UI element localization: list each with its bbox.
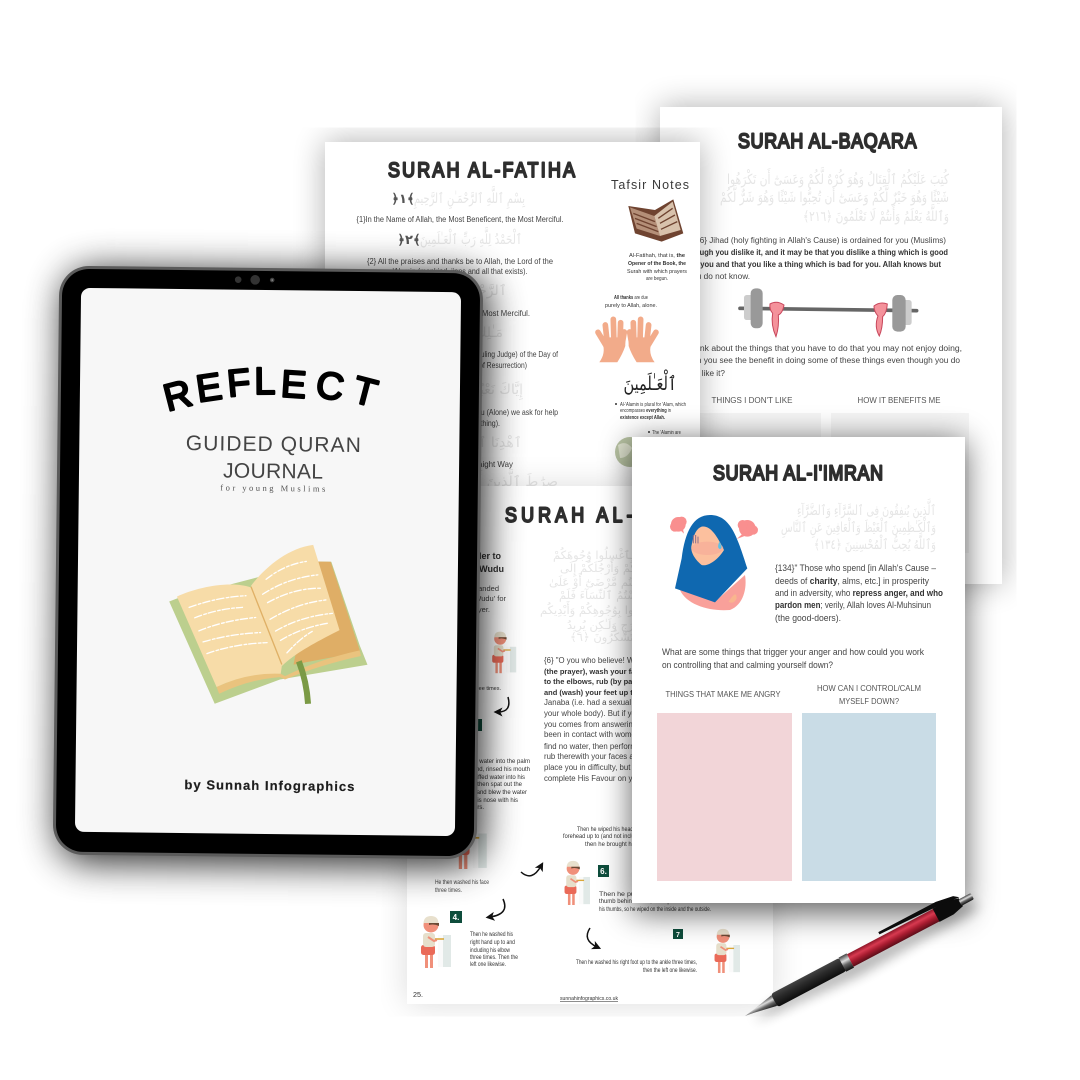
step 7 text [576, 960, 697, 974]
column label: MYSELF DOWN? [839, 696, 899, 706]
column label [817, 683, 921, 706]
arrow [498, 697, 509, 712]
verses and translations: مَـٰلِكِ يَوْمِ ٱلدِّينِ [412, 324, 503, 343]
verses and translations: (for each and everything). [420, 419, 500, 428]
tablet screen [75, 288, 461, 836]
wudu heading: performing Wudu [429, 564, 504, 574]
answer box [831, 413, 969, 553]
verses and translations [356, 186, 564, 492]
verses and translations: {1}In the Name of Allah, the Most Beneficent, the Most Merciful. [356, 215, 564, 224]
verses and translations: Recompense (i.e. the Day of Resurrection) [400, 361, 527, 370]
figure: boy washing hands [492, 632, 516, 673]
page number: 25. [413, 992, 423, 999]
translation text: find no water, then perform Tayammum with clean earth and [544, 742, 751, 751]
translation text: {6} "O you who believe! When you intend to offer As-Salat [544, 656, 744, 665]
tafsir note: Al-Fatihah: are begun. [646, 276, 668, 282]
step 2 text: and then sniffed water into his [445, 775, 525, 781]
Arabic verse: شَيْئًا وَهُوَ خَيْرٌ لَّكُمْ وَعَسَىٰٓ أَن تُحِبُّوا شَيْئًا وَهُوَ شَرٌّ لَّكُمْ [720, 185, 949, 206]
tablet with journal cover [53, 266, 483, 859]
translation text: your whole body). But if you are ill or on a journey or any of [544, 709, 749, 718]
step 5 text [563, 827, 700, 848]
cover title: REFLECT [159, 360, 382, 423]
cover subtitle [185, 432, 361, 494]
wudu heading [403, 551, 504, 574]
translation text: (the prayer), wash your faces and your hands (forearms) up [544, 667, 757, 676]
translation text: you do not know. [688, 272, 750, 281]
panel: Surah Al-I'Imran page [632, 437, 965, 913]
reflection question: not like it? [688, 369, 726, 378]
figure: boy step 7 [715, 929, 740, 973]
step 5 text: Then he wiped his head with his wet hands, from his [577, 827, 700, 833]
verses and translations: {2} All the praises and thanks be to Allah, the Lord of the [367, 257, 554, 266]
arrow [490, 899, 505, 917]
cover title: REFLECT: F [225, 362, 252, 406]
translation text: place you in difficulty, but He wants to purify you, and to [544, 763, 736, 772]
tafsir bullet notes: Al-'Alamin is plural for 'Alam, which [620, 402, 686, 408]
answer box: pink [657, 713, 792, 881]
verses and translations: ٱهْدِنَا ٱلصِّرَٰطَ ٱلْمُسْتَقِيمَ [379, 432, 522, 451]
verses and translations: {5} You (Alone) we worship, and You (Alone) we ask for help [372, 408, 558, 417]
heading: Surah Al-I'Imran: SURAH AL-I'IMRAN [713, 462, 883, 485]
translation text: pardon men; verily, Allah loves Al-Muhsinun [775, 600, 931, 610]
step 7 text: Then he washed his right foot up to the ankle three times, [576, 960, 697, 966]
step number 6: 6. [600, 867, 607, 876]
step 2 text: He then took water into the palm [444, 759, 530, 765]
step number 2 [470, 719, 482, 731]
step 2 text: out of his nose with his [457, 798, 518, 804]
tablet shadow [58, 270, 488, 866]
wudu intro text: water and showed Wudu' for [410, 594, 506, 603]
reflection question [662, 647, 924, 670]
heading: Surah Al-Baqara: SURAH AL-BAQARA [738, 130, 917, 153]
Arabic verse: ٱلَّذِينَ يُنفِقُونَ فِى ٱلسَّرَّآءِ وَٱلضَّرَّآءِ [797, 498, 936, 519]
heading: Tafsir Notes: Tafsir Notes [611, 178, 689, 192]
reflection question: on controlling that and calming yourself down? [662, 660, 833, 670]
illustration: open book [168, 543, 369, 705]
Arabic verse: أَوْ لَـٰمَسْتُمُ ٱلنِّسَآءَ فَلَمْ [559, 585, 664, 603]
verses and translations: بِسْمِ ٱللَّهِ ٱلرَّحْمَـٰنِ ٱلرَّحِيمِ [413, 186, 525, 209]
verses and translations: ﴿١﴾ [391, 192, 415, 207]
verses and translations: {3} The Most Gracious, the Most Merciful. [388, 309, 530, 318]
cover author: by Sunnah Infographics [184, 777, 355, 794]
tafsir note: Al-Fatihah: Opener of the Book, the [628, 261, 686, 267]
Arabic verse: مِنْ حَرَجٍ وَلَـٰكِن يُرِيدُ [567, 617, 660, 636]
step 3 caption [435, 880, 490, 894]
tafsir bullet notes: existence except Allah. [620, 415, 665, 421]
icon: open brown book [628, 199, 683, 242]
Arabic word: Al-Alamin: ٱلْعَـٰلَمِينَ [624, 369, 676, 395]
pen [739, 886, 980, 1031]
step number 4 [450, 911, 462, 923]
step 5 text: forehead up to (and not including) the back of his neck, [563, 834, 700, 840]
tafsir bullet notes [615, 402, 686, 436]
verses and translations: 'Alamin (mankind, jinns and all that exists). [392, 267, 528, 276]
Arabic verse: لَعَلَّكُمْ تَشْكُرُونَ ﴿٦﴾ [570, 626, 665, 645]
figure: boy step 6 [565, 861, 590, 905]
Arabic verse: فَٱمْسَحُوا بِوُجُوهِكُمْ وَأَيْدِيكُم [540, 600, 670, 618]
step 2 text: of his right hand, rinsed his mouth [440, 767, 530, 773]
Arabic verse [781, 498, 936, 553]
step 4 text: three times. Then the [470, 955, 519, 961]
verses and translations: ٱلْحَمْدُ لِلَّهِ رَبِّ ٱلْعَـٰلَمِينَ [420, 227, 522, 248]
arrow [587, 928, 597, 947]
tafsir note: Al-Fatihah: Al-Fatihah, that is, the [629, 253, 685, 259]
step 6 text: his thumbs, so he wiped on the inside and the outside. [599, 907, 711, 913]
arrow [521, 866, 541, 876]
reflection question [688, 344, 962, 378]
step 5 text: then he brought his hands back to the front. [585, 842, 700, 848]
wudu intro text: Uthman (RA) demanded [418, 584, 499, 593]
figure: boy washing face (step 3) [454, 813, 487, 869]
wudu intro text [410, 584, 506, 614]
translation text: {216} Jihad (holy fighting in Allah's Cause) is ordained for you (Muslims) [688, 236, 946, 245]
step number 6 [598, 865, 609, 877]
cover title: REFLECT: C [313, 364, 347, 410]
panel: Surah Al-Baqara page [660, 107, 1002, 584]
step 4 text: left one likewise. [470, 962, 506, 968]
translation text: though you dislike it, and it may be that you dislike a thing which is good [688, 248, 948, 257]
translation text [544, 656, 757, 783]
column label: HOW CAN I CONTROL/CALM [817, 683, 921, 693]
Arabic verse: وَٱللَّهُ يُحِبُّ ٱلْمُحْسِنِينَ ﴿١٣٤﴾ [814, 532, 936, 553]
cover subtitle: GUIDED QURAN [186, 432, 361, 457]
verses and translations: ٱلرَّحْمَـٰنِ ٱلرَّحِيمِ [408, 283, 507, 301]
cover subtitle: JOURNAL [223, 459, 323, 484]
Arabic verse [720, 167, 949, 225]
verses and translations: ﴿٢﴾ [397, 233, 421, 248]
step 6 text: Then he put his index fingers in his ears and his [599, 892, 749, 898]
figure: boy step 4 [421, 916, 451, 968]
cover title: REFLECT: L [254, 361, 276, 403]
answer box: blue [802, 713, 936, 881]
step 3 caption: three times. [435, 888, 462, 894]
step 2 text [440, 759, 530, 811]
step number 7: 7 [676, 932, 680, 939]
translation text: to the elbows, rub (by passing wet hands over) your heads, [544, 677, 755, 686]
translation text: for you and that you like a thing which is bad for you. Allah knows but [688, 260, 941, 269]
step 2 text: nose—then spat out the [458, 782, 523, 788]
tafsir note: All thanks: All thanks are due [614, 295, 648, 301]
tafsir note: Al-Fatihah [627, 253, 688, 282]
icon: barbell with arms [740, 288, 917, 337]
camera dots [235, 275, 275, 285]
step 7 text: then the left one likewise. [643, 968, 697, 974]
column label: THINGS I DON'T LIKE [712, 395, 793, 405]
translation text: Janaba (i.e. had a sexual discharge), purify yourself (bathe [544, 698, 747, 707]
cover title: REFLECT: E [193, 366, 225, 411]
tafsir note: All thanks: purely to Allah, alone. [605, 303, 657, 309]
icon: globe [615, 437, 645, 467]
translation text: rub therewith your faces and hands. Allah does not want to [544, 752, 747, 761]
icon: angry girl in hijab [670, 515, 758, 610]
step 4 text: Then he washed his [470, 932, 513, 938]
column label: HOW IT BENEFITS ME [858, 395, 941, 405]
caption: He washed his hands three times. [418, 686, 501, 692]
reflection question: can you see the benefit in doing some of these things even though you do [688, 356, 961, 365]
answer box [684, 413, 821, 553]
step 6 text [599, 892, 749, 913]
translation text: {134}" Those who spend [in Allah's Cause – [775, 563, 936, 573]
translation text [775, 563, 943, 623]
step number 4: 4. [453, 913, 459, 922]
wudu intro text: the prayer. [455, 605, 490, 614]
Arabic verse: وَٱللَّهُ يَعْلَمُ وَأَنتُمْ لَا تَعْلَمُونَ ﴿٢١٦﴾ [803, 204, 949, 225]
column label: THINGS THAT MAKE ME ANGRY [666, 689, 781, 699]
translation text: and (wash) your feet up to ankles. If you are in a state of [544, 688, 745, 697]
step 2 text: fingers. [464, 805, 484, 811]
tafsir bullet notes: encompasses everything in [620, 408, 671, 414]
translation text: you comes from answering the call of nature, or you have [544, 720, 742, 729]
Arabic verse: إِذَا قُمْتُمْ إِلَى ٱلصَّلَوٰةِ فَٱغْسِلُوا وُجُوهَكُمْ [553, 545, 739, 564]
Arabic verse [540, 545, 739, 645]
translation text: deeds of charity, alms, etc.] in prosperity [775, 576, 929, 586]
translation text: (the good-doers). [775, 613, 841, 623]
translation text: complete His Favour on you that you may be thankful. [544, 774, 730, 783]
step 3 caption: He then washed his face [435, 880, 490, 886]
website link: sunnahinfographics.co.uk [560, 996, 618, 1002]
step 4 text [470, 932, 519, 968]
translation text: and in adversity, who repress anger, and who [775, 588, 943, 598]
tafsir note: All thanks [605, 295, 657, 309]
cover title: REFLECT: T [348, 369, 381, 416]
icon: raised hands [598, 319, 656, 362]
step number 7 [673, 929, 683, 939]
reflection question: Think about the things that you have to do that you may not enjoy doing, [688, 344, 962, 353]
verses and translations: إِيَّاكَ نَعْبُدُ وَإِيَّاكَ نَسْتَعِينُ [391, 381, 524, 400]
Arabic verse: وَٱلْكَـٰظِمِينَ ٱلْغَيْظَ وَٱلْعَافِينَ عَنِ ٱلنَّاسِ [781, 517, 936, 538]
step 2 text: water and blew the water [459, 790, 527, 796]
heading: Surah Al-Ma'idah: SURAH AL-MA'IDAH [505, 504, 735, 527]
step 4 text: including his elbow [470, 948, 511, 954]
panel: Surah Al-Fatiha page [325, 142, 700, 562]
step 6 text: thumb behind them, he wiped his ears with his index and [599, 899, 749, 905]
cover title: REFLECT: E [280, 364, 308, 407]
verses and translations: صِرَٰطَ ٱلَّذِينَ أَنْعَمْتَ عَلَيْهِمْ [408, 469, 558, 492]
tafsir note: Al-Fatihah: Surah with which prayers [627, 269, 688, 275]
step 4 text: right hand up to and [470, 940, 515, 946]
reflection question: What are some things that trigger your anger and how could you work [662, 647, 924, 657]
verses and translations: {4} The Only Owner (and the Only Ruling Judge) of the Day of [372, 350, 559, 359]
cover title: REFLECT: R [159, 373, 196, 420]
heading: Surah Al-Fatiha: SURAH AL-FATIHA [388, 159, 575, 182]
Arabic verse: وَإِن كُنتُم مَّرْضَىٰٓ أَوْ عَلَىٰ [549, 572, 662, 591]
panel: Surah Al-Ma'idah page [403, 486, 773, 1004]
translation text: been in contact with women (i.e. sexual intercourse) and you [544, 730, 753, 739]
verses and translations: {6} Guide us to the Straight Way [400, 460, 513, 469]
wudu heading: The Prophet's Order to [403, 551, 501, 561]
tafsir bullet notes: The 'Alamin are [652, 430, 681, 436]
translation text [688, 236, 948, 281]
Arabic verse: وَٱمْسَحُوا بِرُءُوسِكُمْ وَأَرْجُلَكُمْ إِلَى [560, 558, 716, 577]
cover subtitle: for young Muslims [220, 482, 325, 494]
Arabic verse: كُتِبَ عَلَيْكُمُ ٱلْقِتَالُ وَهُوَ كُرْهٌ لَّكُمْ وَعَسَىٰٓ أَن تَكْرَهُوا [727, 167, 949, 188]
